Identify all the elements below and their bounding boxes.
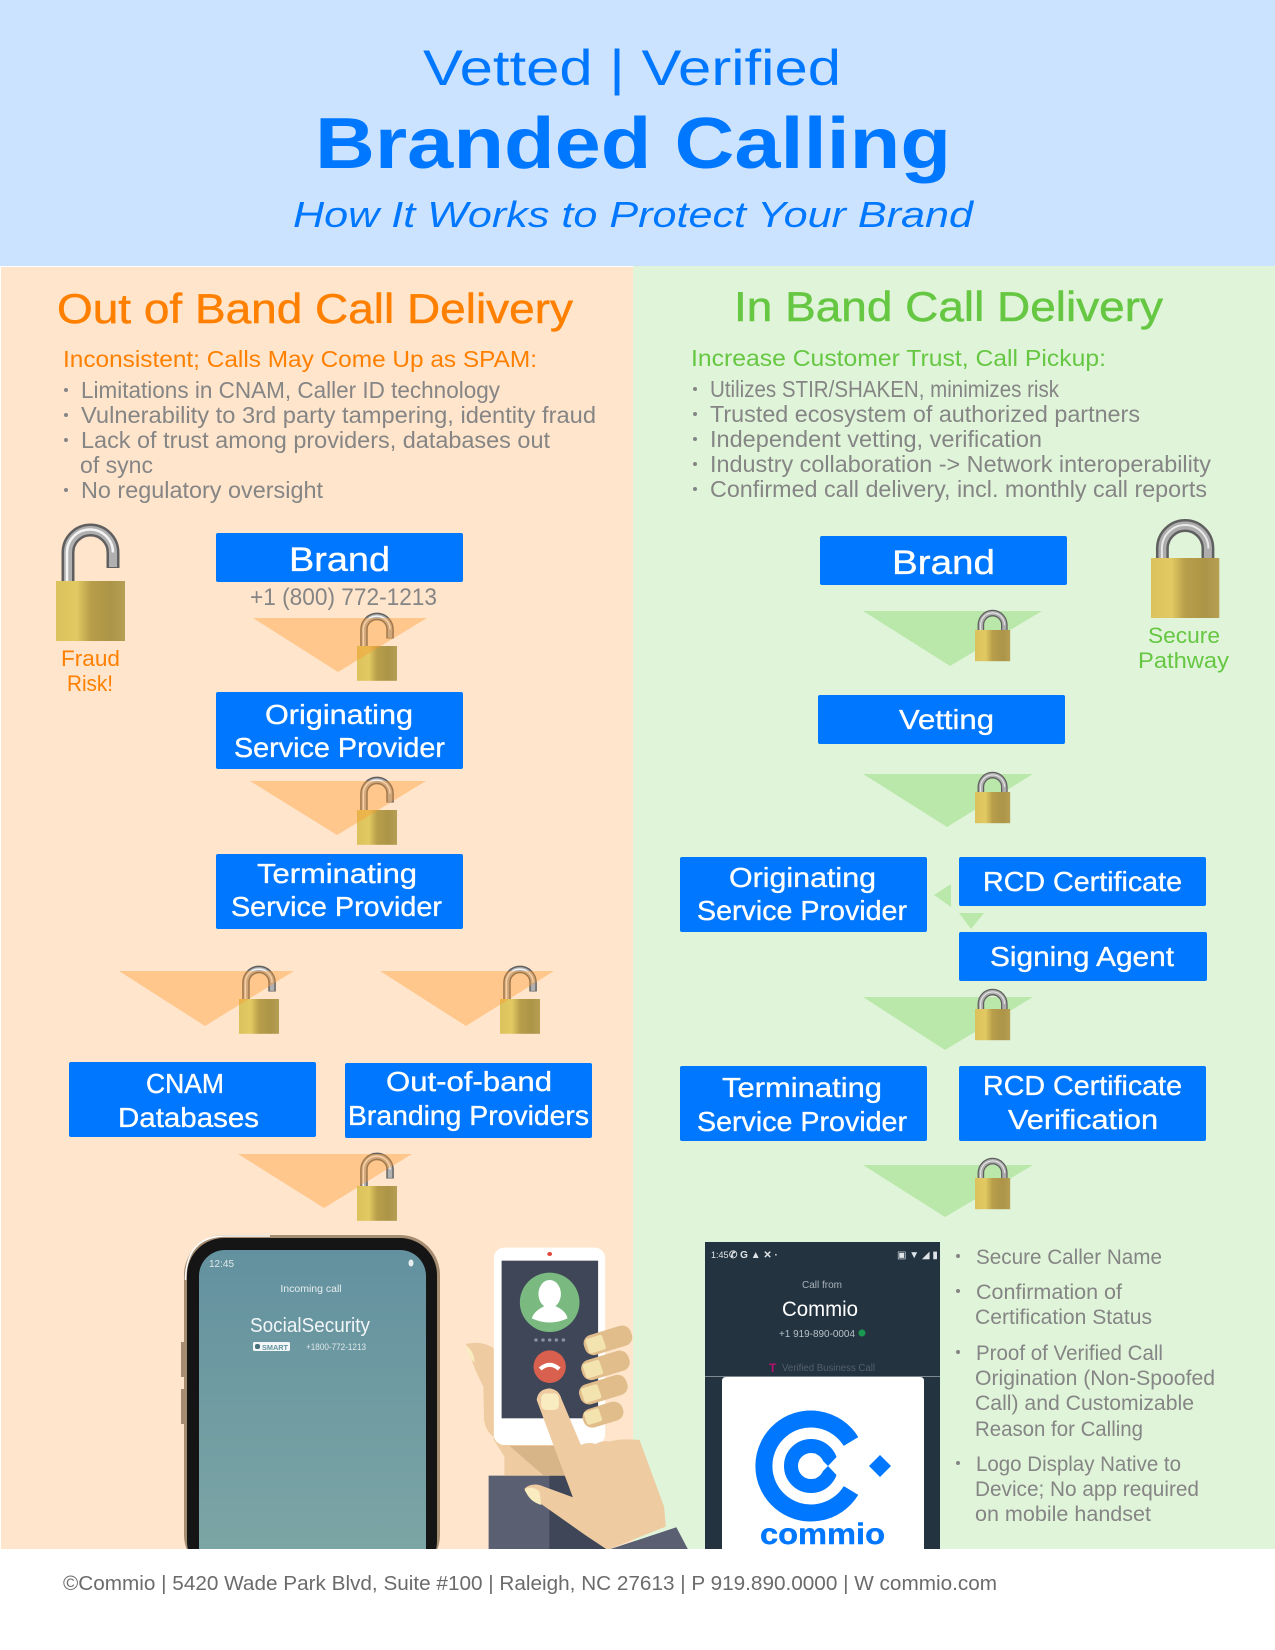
box: terminating service provider [680, 1066, 927, 1141]
risks bullet list: Vulnerability to 3rd party tampering, identity fraud [81, 402, 596, 428]
arrow with lock 1 [863, 611, 1042, 666]
phone screen: verified commio call [705, 1242, 940, 1562]
feature bullet list: Confirmation of [976, 1281, 1122, 1304]
panel: in band call delivery [633, 266, 1275, 1562]
box: originating service provider: Service Provider [234, 732, 445, 763]
phone screen: verified commio call: Commio [782, 1298, 858, 1321]
feature bullet list [956, 1246, 1215, 1526]
phone number: +1 (800) 772-1213 [250, 584, 437, 611]
icon: open lock with fraud risk label: Risk! [67, 671, 113, 696]
feature bullet list: Secure Caller Name [976, 1246, 1162, 1269]
risks bullet list: Limitations in CNAM, Caller ID technology [81, 377, 500, 403]
box: brand: Brand [289, 541, 390, 579]
box: vetting [818, 695, 1065, 744]
benefits bullet list: Independent vetting, verification [710, 426, 1042, 452]
box: rcd certificate verification: RCD Certificate [983, 1070, 1182, 1101]
panel: out of band call delivery [1, 267, 688, 1580]
box: originating service provider: Originating [729, 862, 876, 893]
phone screen: verified commio call: Verified Business Call [782, 1363, 875, 1374]
title line: vetted verified: Vetted | Verified [423, 40, 841, 96]
footer [0, 1549, 1275, 1650]
feature bullet list: Call) and Customizable [975, 1392, 1194, 1415]
main title: Branded Calling [315, 104, 951, 184]
box: cnam databases [69, 1062, 316, 1137]
arrow with open lock 4 [380, 969, 554, 1034]
phone screen: verified commio call: T [769, 1361, 777, 1375]
phone: spoofed incoming call: SocialSecurity [250, 1315, 370, 1337]
arrow with open lock 2 [250, 780, 426, 845]
feature bullet list: Proof of Verified Call [976, 1342, 1163, 1365]
illustration: hand holding phone [466, 1248, 688, 1551]
footer: ©Commio | 5420 Wade Park Blvd, Suite #100 | Raleigh, NC 27613 | P 919.890.0000 | W commio.com [63, 1573, 997, 1595]
heading: out of band: Out of Band Call Delivery [57, 285, 573, 332]
arrow with lock 2 [863, 774, 1033, 827]
feature bullet list: Origination (Non-Spoofed [975, 1367, 1215, 1390]
risks bullet list [64, 377, 596, 503]
box: originating service provider [216, 692, 463, 769]
phone: spoofed incoming call: Incoming call [280, 1283, 342, 1295]
box: rcd certificate verification: Verification [1008, 1104, 1158, 1135]
phone screen: verified commio call: Call from [802, 1280, 842, 1291]
box: out-of-band branding providers: Branding Providers [348, 1100, 589, 1131]
box: rcd certificate verification [959, 1066, 1206, 1141]
phone screen: verified commio call: ▣ ▼ ◢ ▮ [897, 1250, 938, 1261]
arrow with open lock 1 [253, 616, 427, 681]
risks bullet list: No regulatory oversight [81, 477, 324, 503]
icon: closed lock with secure pathway label [1138, 525, 1229, 673]
benefits bullet list: Confirmed call delivery, incl. monthly call reports [710, 476, 1207, 502]
arrow with lock 3 [863, 992, 1033, 1050]
box: rcd certificate [959, 857, 1206, 906]
feature bullet list: Logo Display Native to [976, 1453, 1181, 1476]
feature bullet list: Reason for Calling [975, 1418, 1143, 1441]
arrow with lock 4 [863, 1161, 1033, 1217]
phone: spoofed incoming call: 12:45 [209, 1259, 234, 1270]
phone screen: verified commio call: 1:45 [711, 1250, 729, 1260]
benefits bullet list: Utilizes STIR/SHAKEN, minimizes risk [710, 376, 1059, 402]
box: out-of-band branding providers: Out-of-band [386, 1066, 552, 1097]
icon: open lock with fraud risk label: Fraud [61, 646, 120, 671]
benefits bullet list: Industry collaboration -> Network interoperability [710, 451, 1211, 477]
header banner [0, 0, 1275, 266]
feature bullet list: Certification Status [975, 1306, 1152, 1329]
phone: spoofed incoming call: SMART [262, 1343, 288, 1352]
box: brand: Brand [892, 544, 995, 582]
box: originating service provider: Service Provider [697, 895, 907, 926]
phone: spoofed incoming call [181, 1235, 440, 1580]
phone screen: verified commio call: +1 919-890-0004 [779, 1329, 855, 1340]
box: originating service provider: Originating [265, 699, 413, 730]
benefits bullet list: Trusted ecosystem of authorized partners [710, 401, 1140, 427]
feature bullet list: Device; No app required [975, 1478, 1199, 1501]
arrow with open lock 5 [238, 1154, 412, 1221]
box: signing agent [959, 932, 1207, 981]
phone screen: verified commio call: ✆ G ▲ ✕ · [729, 1250, 778, 1261]
benefits bullet list [693, 376, 1211, 502]
box: terminating service provider: Service Provider [231, 891, 442, 922]
box: rcd certificate: RCD Certificate [983, 866, 1182, 897]
subheading: inconsistent: Inconsistent; Calls May Come Up as SPAM: [63, 346, 537, 372]
box: originating service provider [680, 857, 927, 932]
box: terminating service provider: Service Provider [697, 1106, 907, 1137]
subtitle: How It Works to Protect Your Brand [293, 194, 974, 235]
box: terminating service provider: Terminating [257, 858, 417, 889]
subheading: increase customer trust: Increase Customer Trust, Call Pickup: [691, 345, 1106, 371]
icon: closed lock with secure pathway label: Secure [1148, 623, 1220, 648]
icon: open lock with fraud risk label [56, 530, 125, 696]
icon: closed lock with secure pathway label: Pathway [1138, 648, 1229, 673]
heading: in band: In Band Call Delivery [734, 283, 1163, 330]
phone: spoofed incoming call: +1800-772-1213 [306, 1342, 366, 1352]
commio logo [760, 1419, 891, 1551]
arrow with open lock 3 [119, 969, 294, 1034]
risks bullet list: of sync [80, 452, 153, 478]
box: signing agent: Signing Agent [990, 941, 1174, 972]
box: brand [216, 533, 463, 582]
risks bullet list: Lack of trust among providers, databases out [81, 427, 551, 453]
small arrow: left [934, 884, 951, 907]
small arrow: down [959, 913, 984, 929]
box: vetting: Vetting [899, 704, 994, 735]
box: cnam databases: Databases [118, 1102, 259, 1133]
box: brand [820, 536, 1067, 585]
box: out-of-band branding providers [345, 1063, 592, 1138]
box: terminating service provider: Terminating [722, 1072, 882, 1103]
feature bullet list: on mobile handset [975, 1503, 1151, 1526]
box: terminating service provider [216, 854, 463, 929]
box: cnam databases: CNAM [146, 1068, 224, 1099]
commio logo: commio [760, 1518, 885, 1551]
